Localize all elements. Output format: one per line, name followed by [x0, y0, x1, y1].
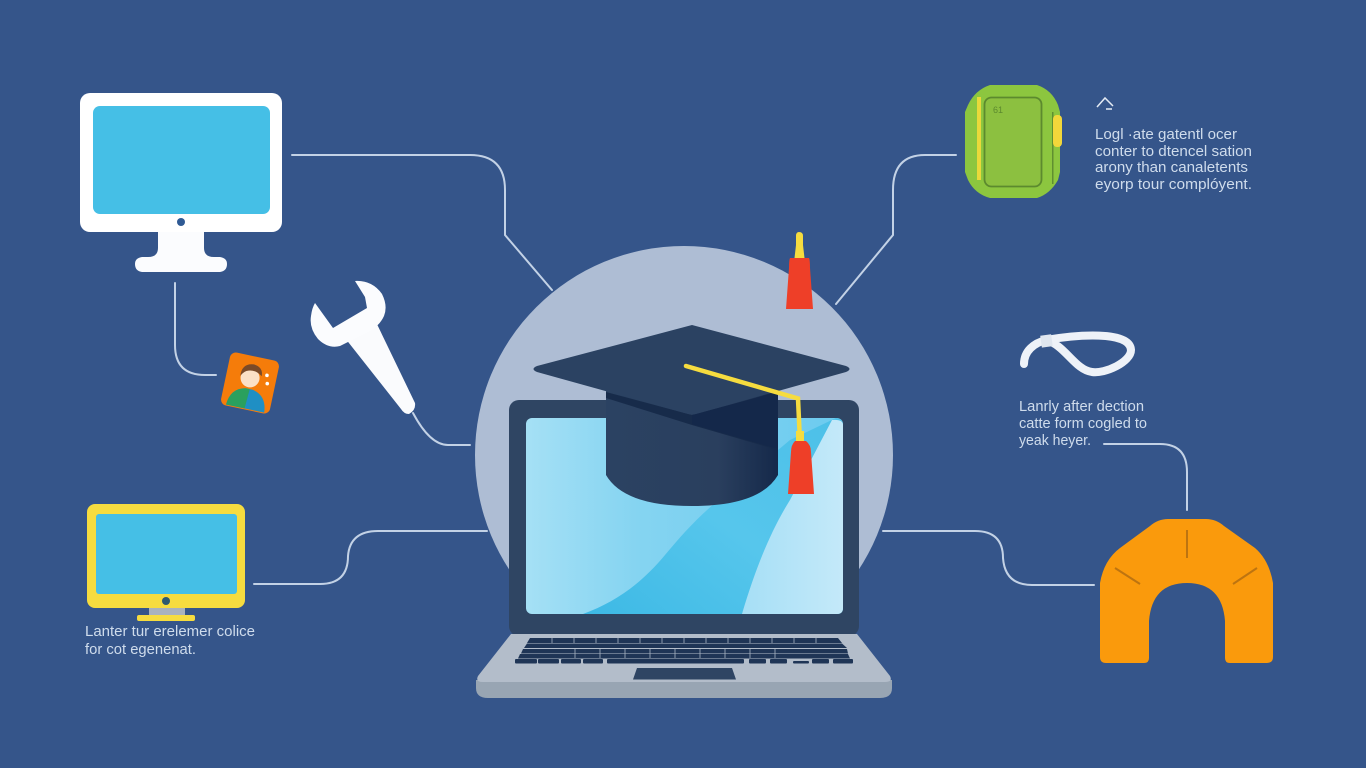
- text block: upper right caption: arony than canaletents: [1095, 159, 1248, 176]
- text block: middle right caption: catte form cogled to: [1019, 415, 1147, 432]
- keyboard: [515, 638, 853, 664]
- text block: upper right caption: eyorp tour complóyent.: [1095, 176, 1252, 193]
- floating tassel: [786, 232, 813, 309]
- icon: green device: [965, 85, 1062, 198]
- icon: wrench: [311, 281, 415, 414]
- icon: small chevron: [1097, 98, 1113, 109]
- laptop: [476, 400, 892, 698]
- text block: lower left caption: Lanter tur erelemer colice: [85, 623, 255, 640]
- text block: lower left caption: [85, 623, 255, 658]
- cap tassel: [788, 431, 814, 494]
- cap cord: [686, 366, 800, 442]
- connector lines: [175, 155, 1187, 585]
- text block: upper right caption: conter to dtencel sation: [1095, 143, 1252, 160]
- icon: orange arch: [1100, 519, 1273, 663]
- cap board: [534, 325, 850, 414]
- text block: upper right caption: Logl ·ate gatentl ocer: [1095, 126, 1237, 143]
- text block: middle right caption: yeak heyer.: [1019, 432, 1091, 449]
- laptop base: [476, 634, 892, 698]
- icon: green device: 61: [993, 105, 1003, 115]
- laptop lid: [509, 400, 859, 636]
- trackpad: [633, 668, 736, 680]
- text block: middle right caption: [1019, 398, 1147, 449]
- icon: person badge: [220, 351, 280, 415]
- laptop screen: [526, 418, 843, 614]
- text block: middle right caption: Lanrly after dection: [1019, 398, 1144, 415]
- icon: desktop monitor: [80, 93, 282, 272]
- backdrop circle: [475, 246, 893, 664]
- text block: upper right caption: [1095, 126, 1252, 193]
- text block: lower left caption: for cot egenenat.: [85, 641, 196, 658]
- icon: yellow monitor: [87, 504, 245, 621]
- cap body: [606, 390, 778, 506]
- graduation cap: [534, 325, 850, 506]
- icon: white cable loop: [1024, 334, 1131, 372]
